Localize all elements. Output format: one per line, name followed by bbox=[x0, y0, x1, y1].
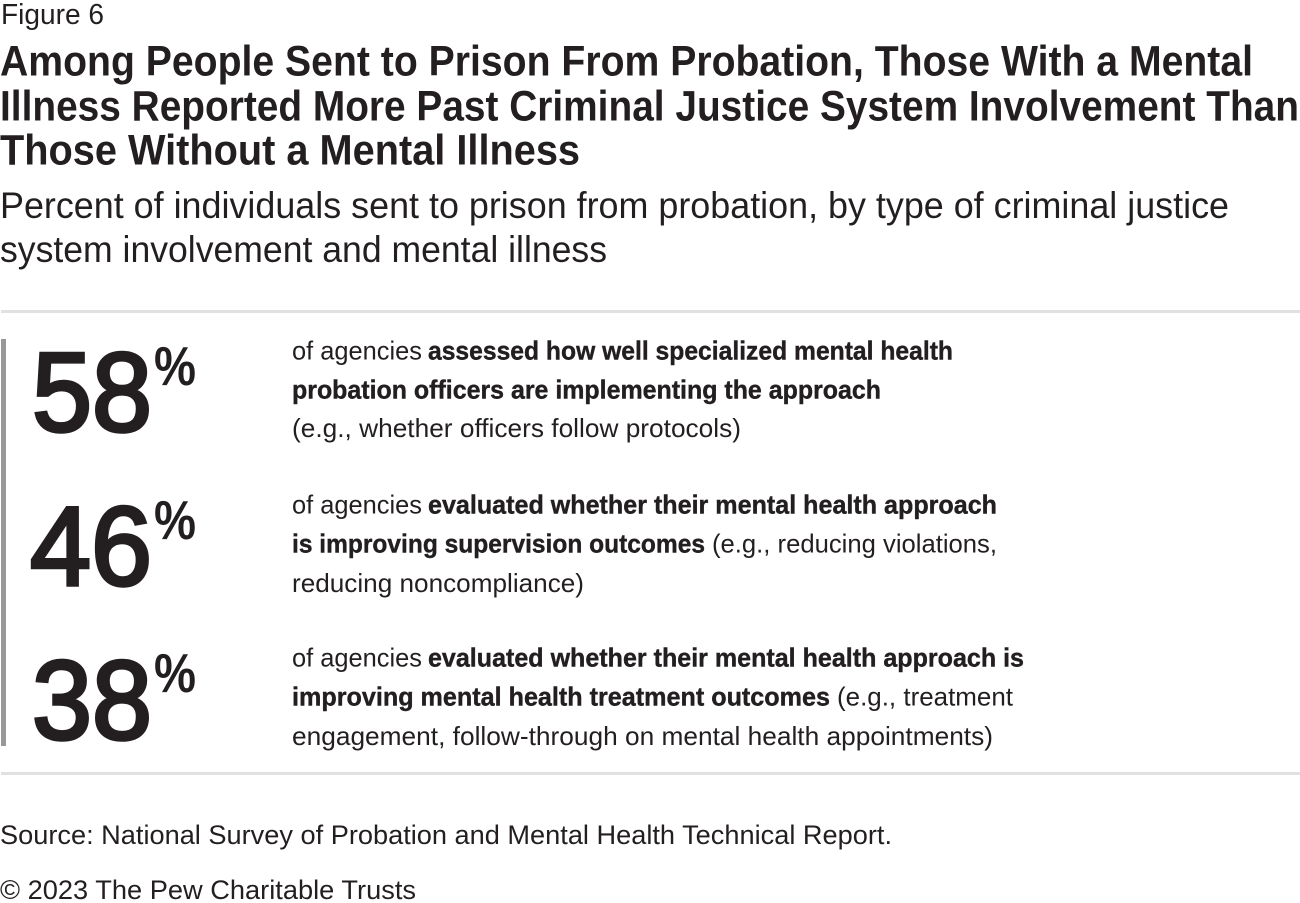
source note: Source: National Survey of Probation and Mental Health Technical Report. bbox=[0, 820, 892, 850]
subtitle bbox=[0, 185, 1229, 270]
stat description 46%: evaluated whether their mental health approach bbox=[428, 490, 997, 520]
stat number 58%: % bbox=[154, 335, 196, 397]
stat description 38%: improving mental health treatment outcomes bbox=[292, 682, 830, 712]
stat: 46 percent bbox=[30, 484, 997, 609]
stat description 58%: assessed how well specialized mental health bbox=[428, 336, 953, 366]
title: Those Without a Mental Illness bbox=[0, 126, 580, 174]
stat description 46%: reducing noncompliance) bbox=[292, 568, 584, 598]
subtitle: system involvement and mental illness bbox=[0, 229, 607, 270]
stat number 46%: % bbox=[154, 489, 196, 551]
stat description 38% bbox=[292, 642, 1024, 751]
stat description 46%: of agencies bbox=[292, 490, 422, 520]
stat description 38%: evaluated whether their mental health approach is bbox=[428, 642, 1024, 672]
stat description 58%: probation officers are implementing the approach bbox=[292, 374, 881, 404]
stat description 38%: (e.g., treatment bbox=[837, 682, 1014, 712]
stat description 38%: of agencies bbox=[292, 642, 422, 672]
stat description 58%: of agencies bbox=[292, 336, 422, 366]
stat number 58%: 58 bbox=[32, 330, 152, 455]
stat number 46%: 46 bbox=[30, 484, 152, 609]
stat: 58 percent bbox=[32, 330, 953, 455]
stat description 46%: (e.g., reducing violations, bbox=[712, 528, 997, 558]
vertical accent bar bbox=[1, 339, 6, 746]
stat description 58%: (e.g., whether officers follow protocols) bbox=[292, 413, 741, 443]
stat description 38%: engagement, follow-through on mental health appointments) bbox=[292, 721, 993, 751]
stat number 38%: % bbox=[154, 642, 196, 704]
stat number 38%: 38 bbox=[32, 638, 152, 763]
stat: 38 percent bbox=[32, 638, 1024, 763]
subtitle: Percent of individuals sent to prison from probation, by type of criminal justice bbox=[0, 185, 1229, 226]
stat description 46% bbox=[292, 490, 997, 598]
title bbox=[0, 38, 1299, 174]
stat description 46%: is improving supervision outcomes bbox=[292, 528, 705, 558]
stat description 58% bbox=[292, 336, 953, 443]
